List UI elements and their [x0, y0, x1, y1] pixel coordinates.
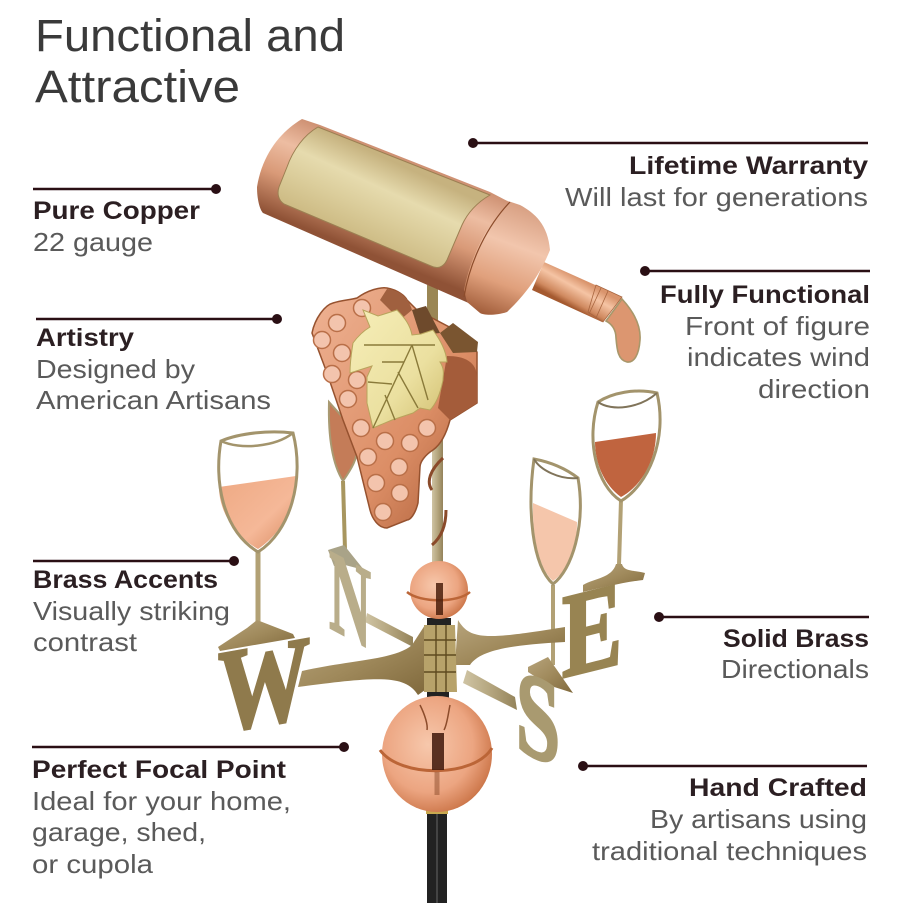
- vine leaf: [350, 310, 447, 428]
- glass west: [218, 432, 297, 651]
- glass east: [583, 391, 660, 592]
- pouring lip: [606, 299, 640, 362]
- callout: lifetime warranty: Will last for generations: [565, 182, 868, 212]
- bottle body: [257, 119, 515, 308]
- spout neck: [532, 262, 622, 322]
- callout: artistry: Artistry: [36, 324, 134, 352]
- callout: brass accents: Visually striking: [33, 596, 230, 626]
- title: Attractive: [35, 61, 240, 112]
- callout: fully functional: Fully Functional: [660, 281, 870, 309]
- centre collar: [424, 618, 457, 702]
- callout: pure copper: 22 gauge: [33, 227, 153, 257]
- collar: [588, 285, 622, 322]
- callout: solid brass: Solid Brass: [723, 625, 869, 653]
- callout: brass accents: [33, 556, 239, 657]
- wine bottle: [257, 119, 622, 322]
- letter S: S: [516, 642, 560, 793]
- shoulder: [464, 195, 550, 315]
- tendril: [429, 458, 446, 545]
- callout: perfect focal point: [32, 742, 349, 879]
- callout: perfect focal point: Ideal for your home,: [32, 786, 291, 816]
- callout: perfect focal point: or cupola: [32, 849, 154, 879]
- callout: fully functional: Front of figure: [685, 311, 870, 341]
- callout: solid brass: Directionals: [721, 654, 869, 684]
- small copper ball: [407, 561, 470, 619]
- callout: perfect focal point: garage, shed,: [32, 817, 206, 847]
- callout: hand crafted: [578, 761, 867, 866]
- callout: perfect focal point: Perfect Focal Point: [32, 756, 287, 784]
- callout: brass accents: Brass Accents: [33, 566, 218, 594]
- callout: artistry: Designed by: [36, 354, 195, 384]
- callout: lifetime warranty: Lifetime Warranty: [629, 152, 868, 180]
- callout: brass accents: contrast: [33, 627, 138, 657]
- callout: pure copper: [33, 184, 221, 257]
- callout: pure copper: Pure Copper: [33, 197, 200, 225]
- callout: hand crafted: Hand Crafted: [689, 774, 867, 802]
- callout: lifetime warranty: [468, 138, 868, 212]
- callout: artistry: American Artisans: [36, 385, 271, 415]
- title: [35, 10, 345, 112]
- callout: hand crafted: traditional techniques: [592, 836, 867, 866]
- directional arms: [298, 613, 565, 710]
- callout: solid brass: [654, 612, 869, 684]
- grape cluster: [312, 288, 478, 545]
- pole: [426, 808, 448, 903]
- letter N: N: [329, 526, 371, 675]
- letter W: W: [218, 612, 310, 759]
- callout: fully functional: direction: [758, 374, 870, 404]
- back glass: [328, 402, 364, 570]
- letter E: E: [562, 556, 622, 704]
- brass label: [278, 127, 490, 268]
- grapes: [314, 300, 436, 520]
- support rod: [427, 285, 443, 570]
- title: Functional and: [35, 10, 345, 61]
- callout: hand crafted: By artisans using: [650, 804, 867, 834]
- callout: fully functional: [640, 266, 870, 404]
- large copper ball: [380, 696, 492, 812]
- glass south: [528, 459, 580, 693]
- callout: artistry: [36, 314, 282, 415]
- weathervane: [218, 119, 660, 903]
- callout: fully functional: indicates wind: [687, 342, 870, 372]
